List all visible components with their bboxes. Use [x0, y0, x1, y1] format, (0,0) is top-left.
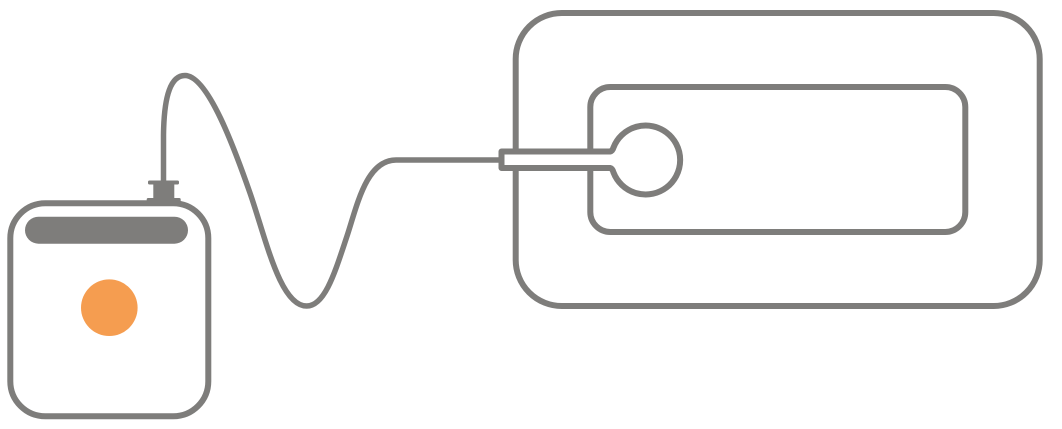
device display bar — [25, 217, 188, 244]
connector and round electrode — [502, 126, 680, 194]
patch inner border — [590, 87, 965, 232]
cable — [164, 76, 500, 306]
orange indicator light — [81, 279, 138, 336]
patch outer border — [516, 13, 1040, 306]
device body — [10, 203, 208, 416]
device port — [147, 180, 181, 204]
